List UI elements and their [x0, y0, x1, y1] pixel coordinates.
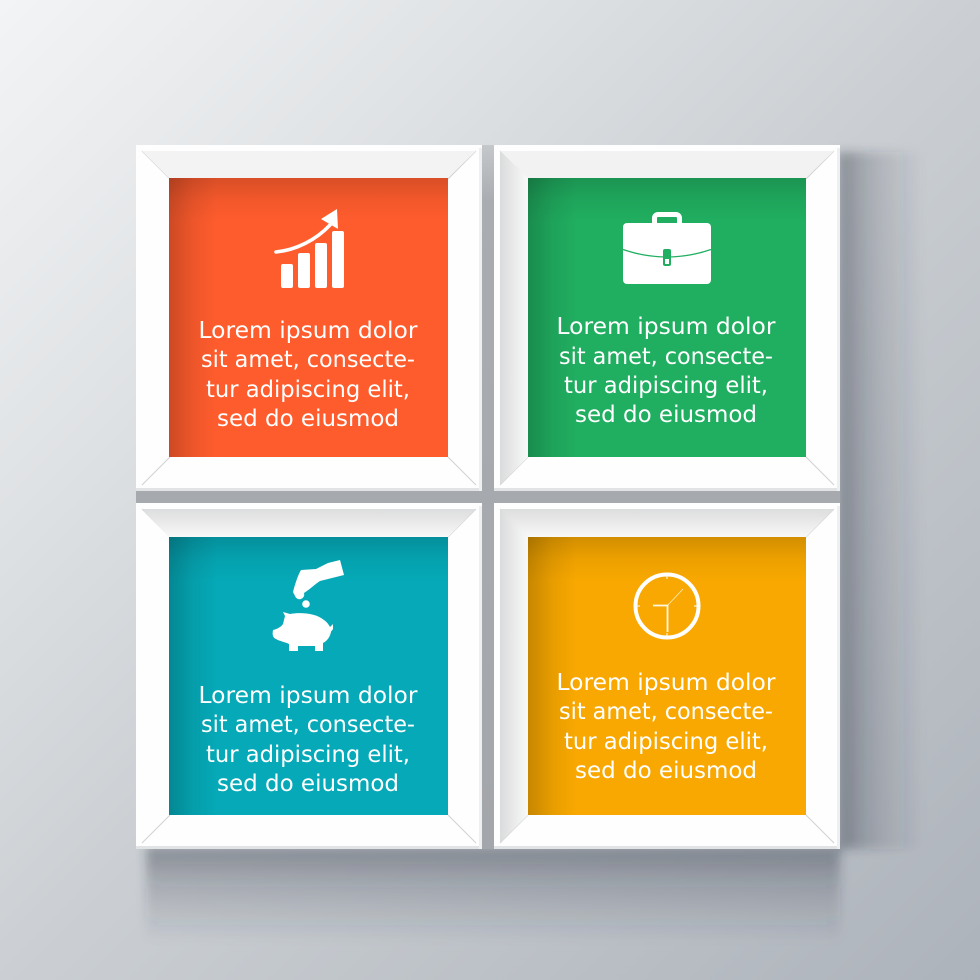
colour square: orange: [169, 178, 448, 457]
text: orange panel: sit amet, consecte-: [201, 346, 415, 373]
text: amber panel: sed do eiusmod: [575, 757, 757, 784]
text: amber panel: [556, 669, 776, 784]
icon: clock: [636, 574, 698, 638]
text: green panel: sed do eiusmod: [575, 401, 757, 428]
frame: orange panel: [136, 145, 482, 491]
frame bevels: top and left: [500, 509, 834, 537]
panel: savings (teal): [136, 503, 482, 849]
text: teal panel: tur adipiscing elit,: [206, 741, 410, 768]
frame bevel: top: [142, 151, 476, 178]
panel: time (amber): [494, 503, 840, 849]
text: green panel: Lorem ipsum dolor: [556, 313, 776, 340]
text: amber panel: Lorem ipsum dolor: [556, 669, 776, 696]
text: teal panel: Lorem ipsum dolor: [198, 682, 418, 709]
icon: briefcase: [623, 214, 711, 284]
text: teal panel: sed do eiusmod: [217, 770, 399, 797]
text: amber panel: sit amet, consecte-: [559, 698, 773, 725]
text: orange panel: [198, 317, 418, 432]
text: green panel: sit amet, consecte-: [559, 343, 773, 370]
frame: green panel: [494, 145, 840, 491]
panel: business (green): [494, 145, 840, 491]
text: green panel: [556, 313, 776, 428]
text: orange panel: Lorem ipsum dolor: [198, 317, 418, 344]
colour square: teal: [169, 537, 448, 815]
text: orange panel: sed do eiusmod: [217, 405, 399, 432]
text: amber panel: tur adipiscing elit,: [564, 728, 768, 755]
cast shadows: [146, 152, 923, 942]
gutter shadows: [136, 145, 840, 849]
icon: bar chart with rising arrow: [276, 209, 344, 288]
text: teal panel: sit amet, consecte-: [201, 711, 415, 738]
text: green panel: tur adipiscing elit,: [564, 372, 768, 399]
colour square: green: [528, 178, 806, 457]
frame bevels: top and left: [500, 151, 834, 178]
text: teal panel: [198, 682, 418, 797]
frame: teal panel: [136, 503, 482, 849]
panel: growth (orange): [136, 145, 482, 491]
text: orange panel: tur adipiscing elit,: [206, 376, 410, 403]
icon: hand dropping coin into piggy bank: [273, 560, 344, 651]
frame: amber panel: [494, 503, 840, 849]
frame bevel: top: [142, 509, 476, 537]
colour square: amber: [528, 537, 806, 815]
